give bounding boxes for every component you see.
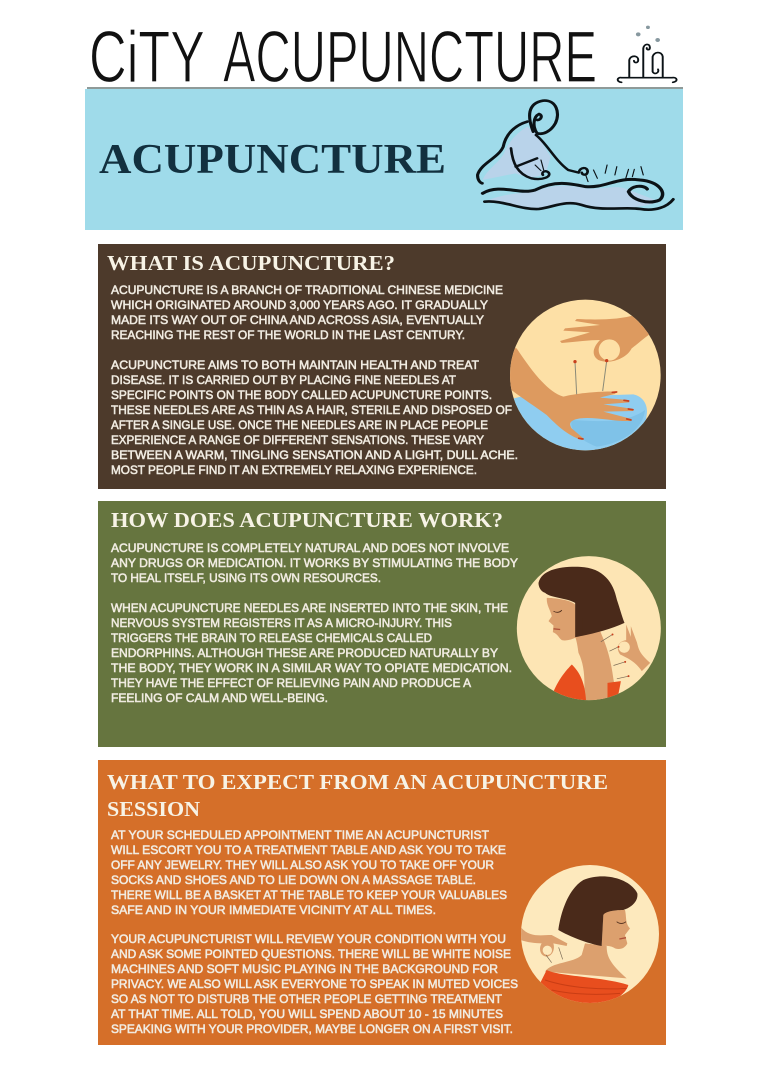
text block: what is acupuncture: THESE NEEDLES ARE AS THIN AS A HAIR, STERILE AND DISPOSED OF xyxy=(111,403,512,417)
text block: what to expect: SAFE AND IN YOUR IMMEDIATE VICINITY AT ALL TIMES. xyxy=(111,903,436,917)
text block: what to expect: YOUR ACUPUNCTURIST WILL REVIEW YOUR CONDITION WITH YOU xyxy=(111,932,506,946)
text block: how it works: TO HEAL ITSELF, USING ITS OWN RESOURCES. xyxy=(111,571,381,585)
heading: WHAT TO EXPECT FROM AN ACUPUNCTURE xyxy=(107,770,608,794)
text block: what is acupuncture: EXPERIENCE A RANGE OF DIFFERENT SENSATIONS. THESE VARY xyxy=(111,433,484,447)
text block: what to expect: WILL ESCORT YOU TO A TREATMENT TABLE AND ASK YOU TO TAKE xyxy=(111,843,506,857)
heading: WHAT IS ACUPUNCTURE? xyxy=(107,251,395,275)
text block: what is acupuncture: BETWEEN A WARM, TINGLING SENSATION AND A LIGHT, DULL ACHE. xyxy=(111,448,518,462)
text block: what to expect: SOCKS AND SHOES AND TO LIE DOWN ON A MASSAGE TABLE. xyxy=(111,873,476,887)
text block: what to expect: OFF ANY JEWELRY. THEY WILL ALSO ASK YOU TO TAKE OFF YOUR xyxy=(111,858,494,872)
panel: title banner xyxy=(85,89,683,230)
text block: what is acupuncture: DISEASE. IT IS CARRIED OUT BY PLACING FINE NEEDLES AT xyxy=(111,373,456,387)
text block: how it works: THEY HAVE THE EFFECT OF RELIEVING PAIN AND PRODUCE A xyxy=(111,676,472,690)
panel: what is acupuncture xyxy=(98,244,666,489)
text block: what to expect: AND ASK SOME POINTED QUESTIONS. THERE WILL BE WHITE NOISE xyxy=(111,947,511,961)
text block: what to expect: THERE WILL BE A BASKET AT THE TABLE TO KEEP YOUR VALUABLES xyxy=(111,888,507,902)
text block: what to expect: MACHINES AND SOFT MUSIC PLAYING IN THE BACKGROUND FOR xyxy=(111,962,498,976)
text block: what to expect: PRIVACY. WE ALSO WILL ASK EVERYONE TO SPEAK IN MUTED VOICES xyxy=(111,977,518,991)
text block: what is acupuncture: REACHING THE REST OF THE WORLD IN THE LAST CENTURY. xyxy=(111,328,465,342)
title: ACUPUNCTURE xyxy=(99,137,446,183)
icon: hands placing needles xyxy=(503,300,661,458)
text block: what to expect: SO AS NOT TO DISTURB THE OTHER PEOPLE GETTING TREATMENT xyxy=(111,992,502,1006)
icon: woman receiving needles at the back xyxy=(517,865,659,1007)
logo wordmark xyxy=(89,17,597,98)
icon: woman with neck needles xyxy=(517,556,661,703)
text block: how it works: THE BODY, THEY WORK IN A SIMILAR WAY TO OPIATE MEDICATION. xyxy=(111,661,512,675)
heading: SESSION xyxy=(107,797,200,821)
text block: what is acupuncture: SPECIFIC POINTS ON THE BODY CALLED ACUPUNCTURE POINTS. xyxy=(111,388,492,402)
text block: how it works: ANY DRUGS OR MEDICATION. IT WORKS BY STIMULATING THE BODY xyxy=(111,556,518,570)
text block: what to expect xyxy=(111,828,518,1036)
panel: what to expect xyxy=(98,760,666,1045)
text block: how it works: WHEN ACUPUNCTURE NEEDLES ARE INSERTED INTO THE SKIN, THE xyxy=(111,601,508,615)
header rule xyxy=(87,87,683,89)
text block: what to expect: AT YOUR SCHEDULED APPOINTMENT TIME AN ACUPUNCTURIST xyxy=(111,828,489,842)
text block: how it works: ACUPUNCTURE IS COMPLETELY NATURAL AND DOES NOT INVOLVE xyxy=(111,541,509,555)
heading xyxy=(107,770,608,821)
text block: what is acupuncture xyxy=(111,283,518,477)
panel: how does acupuncture work xyxy=(98,501,666,747)
heading: HOW DOES ACUPUNCTURE WORK? xyxy=(111,508,503,532)
logo wordmark: CiTY xyxy=(89,17,205,98)
text block: what is acupuncture: ACUPUNCTURE IS A BRANCH OF TRADITIONAL CHINESE MEDICINE xyxy=(111,283,503,297)
logo wordmark: ACUPUNCTURE xyxy=(223,17,597,98)
icon: acupuncturist treating a patient xyxy=(478,101,673,210)
text block: how it works: ENDORPHINS. ALTHOUGH THESE ARE PRODUCED NATURALLY BY xyxy=(111,646,498,660)
text block: what to expect: AT THAT TIME. ALL TOLD, YOU WILL SPEND ABOUT 10 - 15 MINUTES xyxy=(111,1007,503,1021)
text block: how it works xyxy=(111,541,518,705)
icon: logo ornament xyxy=(618,26,677,82)
text block: what is acupuncture: MOST PEOPLE FIND IT AN EXTREMELY RELAXING EXPERIENCE. xyxy=(111,463,477,477)
text block: how it works: NERVOUS SYSTEM REGISTERS IT AS A MICRO-INJURY. THIS xyxy=(111,616,452,630)
text block: what is acupuncture: MADE ITS WAY OUT OF CHINA AND ACROSS ASIA, EVENTUALLY xyxy=(111,313,484,327)
text block: what to expect: SPEAKING WITH YOUR PROVIDER, MAYBE LONGER ON A FIRST VISIT. xyxy=(111,1022,513,1036)
text block: what is acupuncture: WHICH ORIGINATED AROUND 3,000 YEARS AGO. IT GRADUALLY xyxy=(111,298,488,312)
text block: how it works: FEELING OF CALM AND WELL-BEING. xyxy=(111,691,328,705)
text block: how it works: TRIGGERS THE BRAIN TO RELEASE CHEMICALS CALLED xyxy=(111,631,432,645)
text block: what is acupuncture: AFTER A SINGLE USE. ONCE THE NEEDLES ARE IN PLACE PEOPLE xyxy=(111,418,488,432)
text block: what is acupuncture: ACUPUNCTURE AIMS TO BOTH MAINTAIN HEALTH AND TREAT xyxy=(111,358,479,372)
